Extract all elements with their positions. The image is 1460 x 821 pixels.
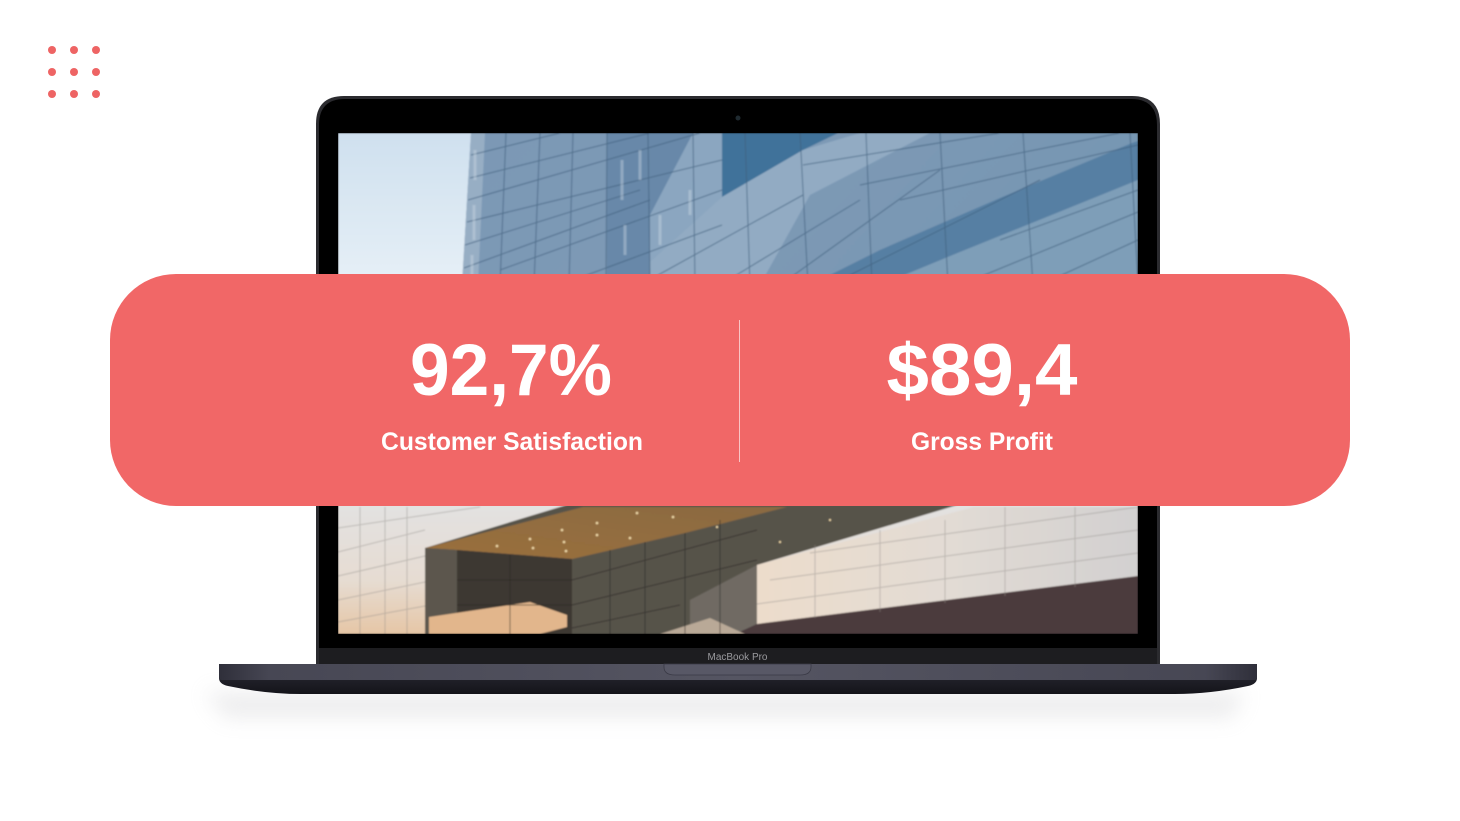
divider xyxy=(739,320,740,462)
banner background xyxy=(110,274,1350,506)
screen photo: glass building xyxy=(338,133,1138,634)
KPI: gross profit: Gross Profit xyxy=(911,428,1054,456)
laptop mockup xyxy=(205,96,1257,718)
laptop shadow xyxy=(205,692,1245,718)
KPI: customer satisfaction: Customer Satisfaction xyxy=(381,428,643,456)
KPI: customer satisfaction: 92,7% xyxy=(410,330,612,411)
laptop base xyxy=(219,664,1257,694)
KPI: gross profit: $89,4 xyxy=(886,330,1078,411)
infographic canvas xyxy=(48,46,1350,720)
laptop model label: MacBook Pro xyxy=(708,652,768,663)
webcam xyxy=(736,116,740,120)
laptop lid xyxy=(316,96,1160,664)
KPI: customer satisfaction xyxy=(381,330,643,456)
decorative dot grid xyxy=(48,46,100,98)
screen photo: lower building entrance xyxy=(338,500,1138,634)
KPI banner xyxy=(110,274,1350,506)
KPI: gross profit xyxy=(886,330,1078,456)
